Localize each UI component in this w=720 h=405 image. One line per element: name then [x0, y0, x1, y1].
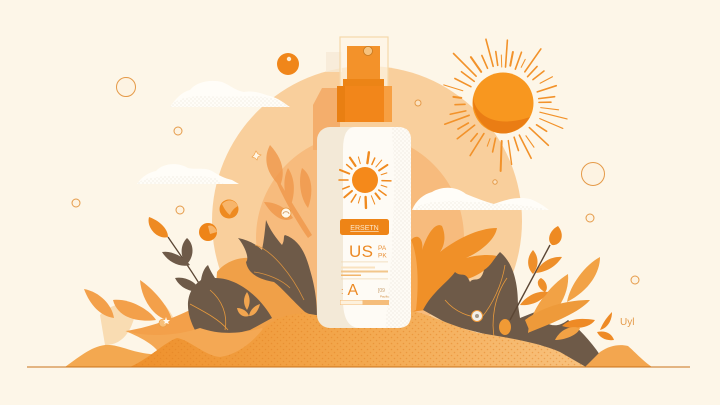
- right brown foliage: [423, 252, 600, 367]
- brown leaves: [162, 238, 201, 292]
- ground line: [27, 366, 690, 368]
- seed: [499, 319, 511, 335]
- orange mound behind left foliage: [215, 258, 317, 335]
- bud: [149, 217, 168, 237]
- big left brown spiky leaf: [238, 220, 317, 318]
- sand centre swoop: [125, 328, 280, 367]
- orange ball left 2: [199, 223, 217, 241]
- orange label: [340, 219, 389, 235]
- right orange leaf cluster: [525, 257, 614, 340]
- right stem with bud: [499, 226, 562, 335]
- collar: [337, 86, 392, 122]
- left orange leaves: [84, 280, 199, 345]
- bottle body: [317, 127, 411, 328]
- bubbles: [72, 78, 639, 284]
- left brown blob leaf: [188, 265, 272, 336]
- cloud left: [137, 164, 239, 184]
- right orange leaves behind foliage: [411, 225, 497, 312]
- large backdrop circle: [212, 66, 522, 332]
- sun disc: [472, 72, 534, 134]
- star sparkle: [252, 151, 261, 160]
- large sun: [444, 39, 567, 171]
- neck ring: [343, 79, 384, 87]
- progress bar: [340, 300, 389, 305]
- PA text: PA: [378, 245, 387, 252]
- sand main dotted hill: [130, 311, 586, 367]
- nozzle: [347, 46, 380, 80]
- cloud top left: [170, 81, 290, 107]
- sunscreen bottle: [317, 37, 411, 328]
- bottle sun emblem: [339, 152, 391, 208]
- sand left tan hill: [65, 345, 205, 367]
- column behind bottle: [326, 52, 342, 72]
- label text: ERSETN: [350, 225, 379, 232]
- bottle front panel: [343, 127, 411, 328]
- sand right tan hill: [585, 345, 652, 367]
- orange ball left 1: [220, 200, 238, 218]
- small code text: [09: [378, 288, 385, 294]
- bud: [549, 226, 562, 245]
- info lines: [341, 262, 388, 279]
- A text: A: [348, 282, 358, 299]
- left stem with leaves: [149, 217, 204, 292]
- small orange sprig: [237, 292, 260, 317]
- clear cap: [340, 37, 388, 87]
- sun crescent shading: [473, 97, 530, 134]
- tiny text: Pacific: [380, 294, 389, 298]
- US text: US: [349, 242, 373, 261]
- small doodle: Uyl: [620, 317, 634, 328]
- background leaf sprig: [264, 145, 312, 238]
- inner backdrop circle: [256, 145, 464, 316]
- orange ball top: [277, 53, 299, 75]
- dots marker: :: [341, 286, 344, 296]
- darker shape beside bottle: [313, 88, 340, 150]
- swirl bead: [281, 208, 291, 218]
- bead left leaves: [159, 317, 170, 327]
- cloud right: [412, 188, 549, 210]
- PK text: PK: [378, 252, 387, 260]
- left pale leaves: [100, 304, 179, 362]
- speckle strip: [385, 127, 411, 328]
- nozzle button: [364, 46, 372, 56]
- sun rays: [444, 39, 567, 171]
- bead right foliage: [472, 310, 482, 322]
